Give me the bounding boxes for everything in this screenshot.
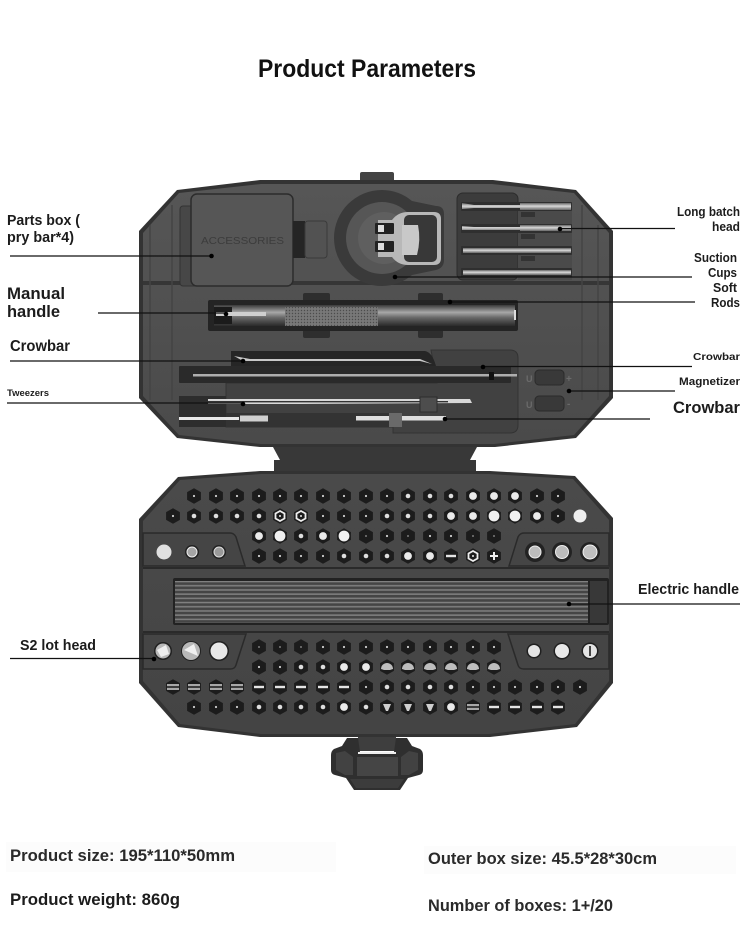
callout: suction cups: [393, 250, 737, 280]
base shell: [139, 471, 613, 737]
callout: crowbar right small: Crowbar: [693, 351, 740, 363]
manual handle: [208, 293, 518, 338]
callout: soft rods: [448, 280, 740, 310]
callout: crowbar left: Crowbar: [10, 338, 70, 355]
callout: magnetizer: Magnetizer: [679, 376, 741, 388]
long batch heads: [457, 193, 572, 280]
spec: product size: Product size: 195*110*50mm: [10, 846, 235, 865]
callout: magnetizer: [567, 376, 741, 393]
magnetizer: -: [567, 399, 570, 410]
handle latch on top edge: [360, 172, 394, 181]
socket panels: [143, 533, 609, 566]
callout: suction cups: Suction: [694, 250, 737, 265]
parts box with accessories lid: [180, 194, 327, 286]
tool tray: [226, 350, 518, 433]
bit grid lower: [166, 639, 587, 715]
hinge between lid and base: [273, 447, 477, 471]
suction cup dial and wrench: [334, 190, 444, 286]
callout: parts box: [7, 212, 214, 258]
callout: crowbar left: [10, 338, 245, 363]
screwdriver tool: [179, 413, 446, 427]
lid shell: [139, 180, 613, 447]
callout: soft rods: Rods: [711, 295, 740, 310]
callout: crowbar right large: [443, 398, 740, 421]
magnetizer: [526, 370, 572, 411]
callout: manual handle: [7, 284, 228, 321]
callout: manual handle: Manual: [7, 284, 65, 303]
bottom latch: [331, 737, 423, 790]
callout: suction cups: Cups: [708, 265, 737, 280]
callout: S2 lot head: S2 lot head: [20, 637, 96, 654]
top case: open lid with tools: [139, 172, 613, 447]
callout: long batch head: Long batch: [677, 204, 740, 219]
callout: tweezers: Tweezers: [7, 388, 49, 399]
callout: parts box: Parts box (: [7, 212, 80, 229]
tweezers: [179, 396, 472, 427]
callout: manual handle: handle: [7, 302, 60, 321]
lower crowbar: [179, 366, 517, 383]
callout: tweezers: [7, 388, 245, 406]
callout: crowbar right large: Crowbar: [673, 398, 740, 417]
callout: electric handle: Electric handle: [638, 581, 739, 598]
magnetizer: U: [526, 400, 532, 410]
callout: crowbar right small: [481, 351, 740, 369]
callout: long batch head: head: [712, 219, 740, 234]
callout: electric handle: [567, 581, 740, 606]
spec: product weight: Product weight: 860g: [10, 890, 180, 909]
magnetizer: U: [526, 374, 532, 384]
electric handle: [173, 578, 609, 625]
spec: outer box size: Outer box size: 45.5*28*30cm: [428, 849, 657, 868]
title: Product Parameters: [258, 55, 476, 83]
callout: parts box: pry bar*4): [7, 229, 74, 246]
parts box with accessories lid: ACCESSORIES: [201, 236, 284, 247]
upper crowbar: [231, 351, 436, 366]
magnetizer: +: [566, 374, 572, 385]
callout: long batch head: [558, 204, 740, 234]
round bits lower row: [154, 641, 598, 661]
bottom case: base with bits: [139, 471, 613, 737]
spec: outer box size: [424, 846, 736, 874]
spec: number of boxes: Number of boxes: 1+/20: [428, 896, 613, 915]
bit grid upper: [166, 488, 586, 564]
spec: product size: [6, 842, 336, 872]
round bits upper row: [156, 542, 600, 562]
callout: S2 lot head: [10, 637, 156, 661]
callout: soft rods: Soft: [713, 280, 738, 295]
